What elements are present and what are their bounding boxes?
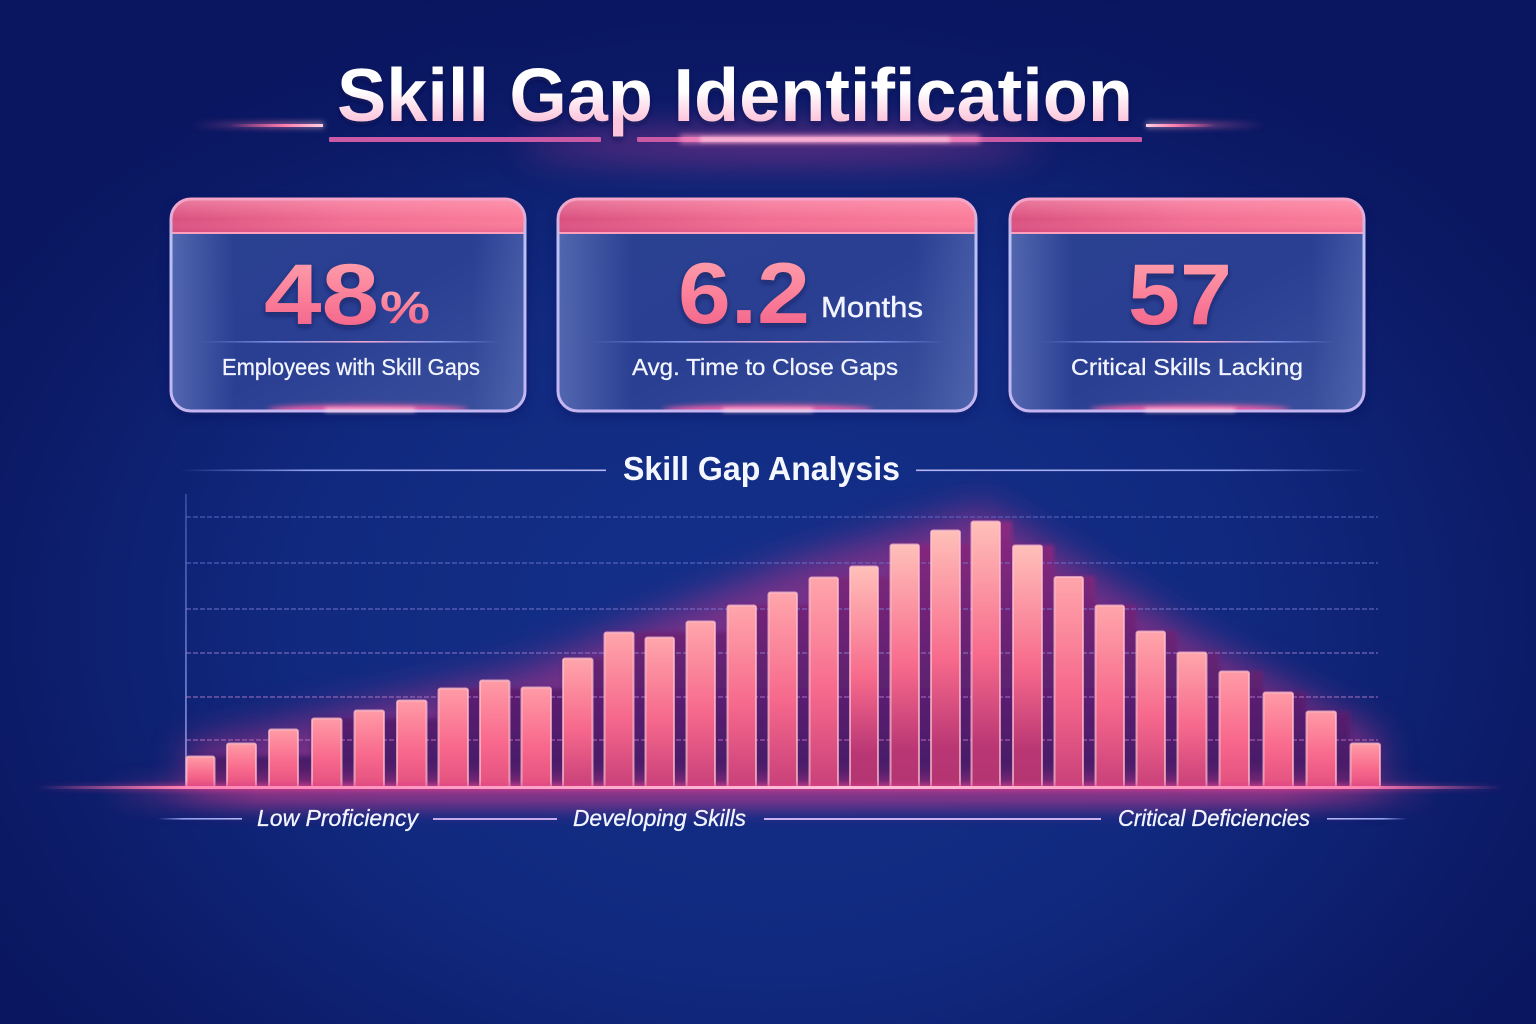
- section heading: Skill Gap Analysis: [623, 450, 900, 487]
- y axis: [185, 494, 187, 786]
- bars: [186, 522, 1380, 788]
- label: Critical Skills Lacking: [1071, 354, 1303, 380]
- value: 48: [264, 247, 379, 343]
- axis labels: [158, 805, 1407, 831]
- value: 6.2: [678, 246, 810, 342]
- value: [678, 246, 923, 342]
- grid lines: [186, 517, 1378, 740]
- value: %: [380, 282, 430, 333]
- value: [264, 247, 430, 343]
- chart glow: [100, 505, 1440, 808]
- panel: average time to close gaps: [558, 199, 976, 415]
- value: Months: [821, 292, 923, 324]
- title underline: [190, 122, 1266, 143]
- value: 57: [1128, 247, 1232, 343]
- axis labels: Low Proficiency: [257, 805, 419, 831]
- baseline: [30, 785, 1510, 790]
- title: Skill Gap Identification: [337, 53, 1133, 137]
- label: Employees with Skill Gaps: [222, 354, 480, 380]
- panel: employees with skill gaps: [171, 199, 525, 415]
- axis labels: Developing Skills: [573, 805, 746, 831]
- panel: critical skills lacking: [1010, 199, 1364, 415]
- label: Avg. Time to Close Gaps: [632, 354, 898, 380]
- bar chart: [30, 494, 1510, 808]
- axis labels: Critical Deficiencies: [1118, 805, 1310, 831]
